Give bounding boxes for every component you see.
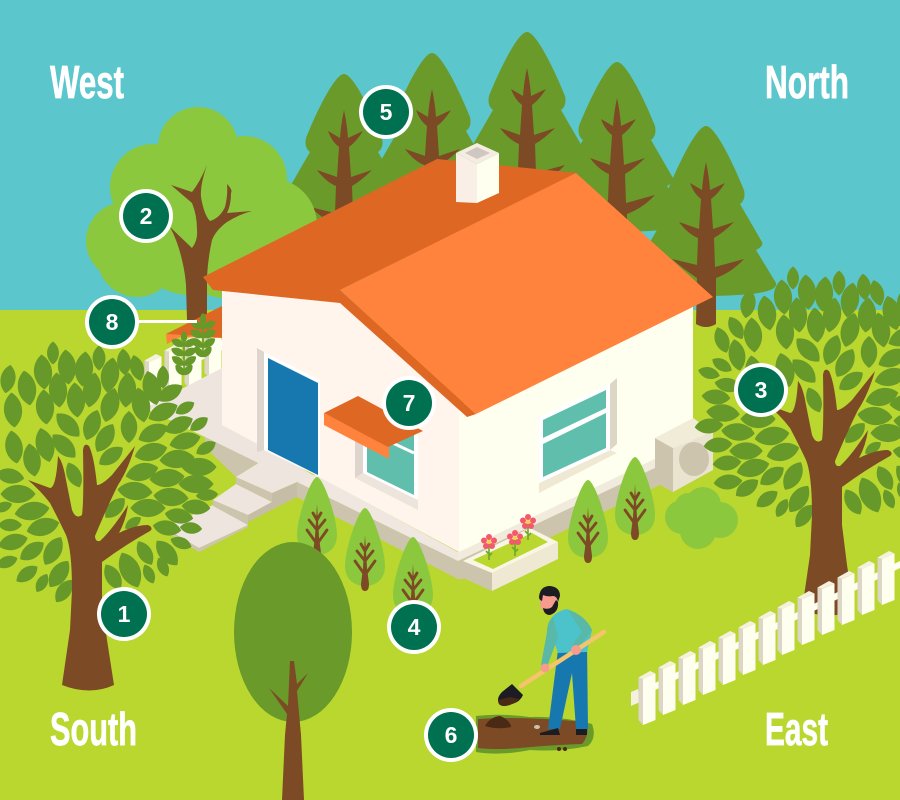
label North: North <box>765 56 849 108</box>
air conditioning unit <box>655 418 713 492</box>
conifer forest to the north <box>274 32 776 327</box>
badge 8 <box>85 295 139 349</box>
badge 8: 8 <box>106 309 119 335</box>
badge 5: 5 <box>380 99 393 125</box>
chimney <box>456 143 499 203</box>
entrance steps <box>165 462 318 552</box>
canopy <box>732 266 900 531</box>
middle step riser <box>213 500 248 525</box>
house <box>203 143 713 579</box>
hair <box>539 586 560 602</box>
small conifer shrubs <box>297 457 655 620</box>
badge 2 <box>119 189 173 243</box>
shovel blade <box>498 684 523 706</box>
shrub <box>665 487 738 549</box>
head <box>540 593 558 613</box>
badge 3 <box>734 363 788 417</box>
trousers <box>548 645 588 729</box>
south tree <box>0 341 219 690</box>
side window <box>539 378 617 493</box>
front wall <box>222 290 459 552</box>
badge 6: 6 <box>445 722 457 748</box>
roof back slope <box>203 159 577 303</box>
top step riser <box>236 477 272 502</box>
side awning by fence <box>166 306 222 344</box>
middle step <box>213 484 272 515</box>
tan foundation left <box>205 437 258 477</box>
left garden fence <box>144 324 222 408</box>
foundation right light strip <box>458 441 693 561</box>
flower planter <box>463 514 558 591</box>
bottom tile <box>165 505 248 548</box>
label South: South <box>50 703 137 755</box>
badge 7 <box>382 376 436 430</box>
side riser <box>248 482 297 522</box>
sleeves <box>541 610 592 667</box>
east tree <box>694 266 900 616</box>
door <box>257 348 320 477</box>
oval south tree <box>234 542 352 800</box>
sweater <box>548 609 592 653</box>
trunk <box>768 370 892 616</box>
badge 7: 7 <box>403 390 415 416</box>
badge 1: 1 <box>118 601 131 627</box>
shovel handle <box>521 632 604 686</box>
paving beside house <box>145 368 318 478</box>
roof eave shadow <box>340 290 476 417</box>
canopy <box>0 341 219 606</box>
foundation right <box>458 465 660 579</box>
landing <box>236 462 318 493</box>
badge 3: 3 <box>755 377 767 403</box>
trunk <box>28 445 152 690</box>
gardener with shovel <box>498 586 604 735</box>
foundation front <box>297 482 463 579</box>
foundation front light strip <box>297 475 458 561</box>
canopy west-side leaves <box>694 314 771 502</box>
badge 4 <box>387 600 441 654</box>
badge 1 <box>97 587 151 641</box>
climbing plant sprigs <box>170 313 217 377</box>
hands <box>540 664 550 672</box>
beard <box>543 600 558 615</box>
awning over front window <box>324 396 423 459</box>
roof front slope <box>340 173 713 414</box>
label East: East <box>765 703 828 755</box>
east fence <box>631 551 900 725</box>
label West: West <box>50 56 124 108</box>
badge 2: 2 <box>140 203 152 229</box>
background lawn <box>0 310 900 800</box>
connector line for badge 8 <box>112 320 197 323</box>
dug soil patch <box>476 715 594 754</box>
badge 6 <box>424 708 478 762</box>
badge 4: 4 <box>408 614 421 640</box>
west tree <box>86 107 317 320</box>
shoes <box>540 728 587 735</box>
front window <box>355 425 418 510</box>
badge 5 <box>359 85 413 139</box>
side wall <box>459 300 693 552</box>
